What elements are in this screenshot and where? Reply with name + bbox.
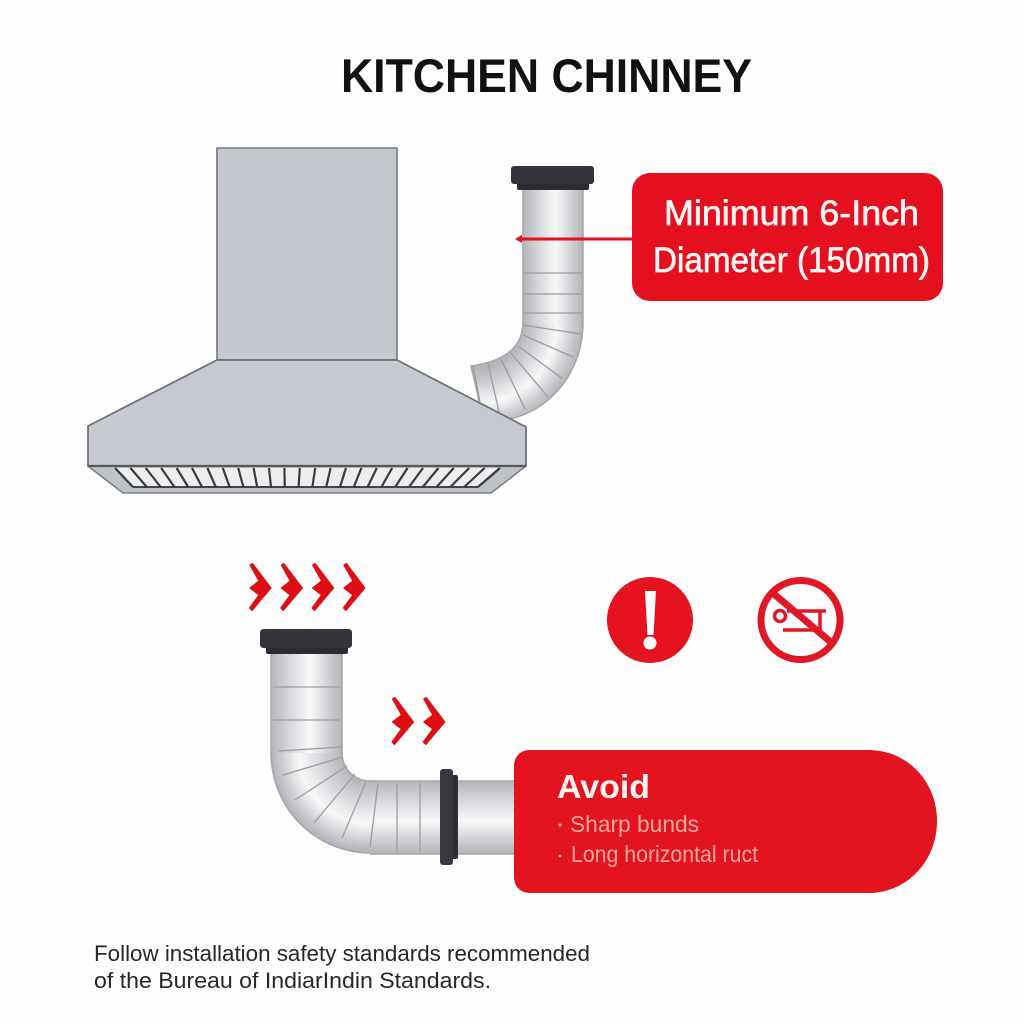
callout: minimum diameter: Minimum 6-Inch: [664, 194, 919, 233]
prohibition icon: [761, 580, 840, 660]
footer note: of the Bureau of IndiarIndin Standards.: [94, 968, 491, 993]
airflow chevrons: middle pair: [392, 698, 445, 744]
warning icon: [607, 577, 693, 663]
pipe flange: [440, 769, 458, 865]
airflow chevrons: top row: [250, 564, 365, 610]
footer note: Follow installation safety standards recommended: [94, 941, 590, 966]
panel: avoid: [514, 750, 937, 893]
chimney hood: [88, 148, 526, 493]
vent slats: [113, 468, 500, 487]
duct cap: [260, 629, 352, 654]
arrow to duct: [515, 235, 634, 243]
duct cap: [511, 166, 594, 190]
lower duct with bend: [260, 629, 520, 865]
panel: avoid: Long horizontal ruct: [571, 841, 759, 867]
title: KITCHEN CHINNEY: [341, 49, 752, 102]
panel: avoid: Sharp bunds: [570, 811, 699, 837]
footer note: [94, 941, 590, 993]
callout: minimum diameter: [515, 173, 943, 301]
upper duct with bend: [471, 166, 594, 420]
callout: minimum diameter: Diameter (150mm): [653, 241, 930, 280]
panel: avoid: Avoid: [557, 768, 650, 805]
